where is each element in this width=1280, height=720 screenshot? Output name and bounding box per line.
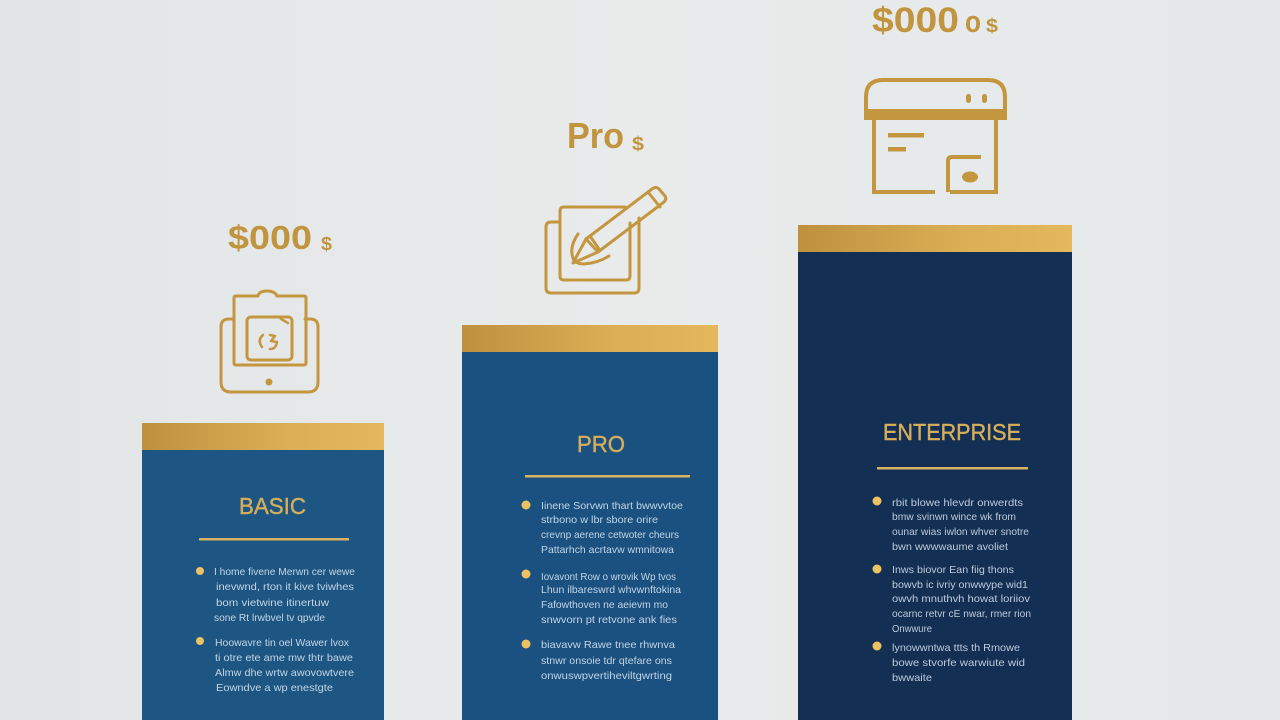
price label: pro: Pro	[567, 115, 624, 156]
feature list: enterprise: bowvb ic ivriy onwwype wid1	[892, 579, 1028, 591]
heading underline: basic	[199, 538, 349, 540]
feature list: enterprise: Onwwure	[892, 623, 932, 635]
feature list: pro: snwvorn pt retvone ank fies	[541, 614, 677, 626]
price label: enterprise: $000	[872, 1, 959, 40]
price label: enterprise	[872, 1, 998, 40]
price label: enterprise: $	[986, 16, 998, 37]
feature list: enterprise: bwwaite	[892, 672, 932, 684]
heading: pro: PRO	[577, 431, 625, 457]
feature list: basic: Almw dhe wrtw awovowtvere	[215, 667, 354, 679]
price label: basic: $000	[228, 219, 312, 256]
icon: pencil on notepad	[546, 188, 666, 293]
feature list: pro	[522, 500, 683, 682]
feature list: pro: stnwr onsoie tdr qtefare ons	[541, 655, 672, 667]
heading underline: enterprise	[877, 467, 1028, 470]
feature list: pro: Iovavont Row o wrovik Wp tvos	[541, 571, 676, 583]
feature list: enterprise: ocarnc retvr cE nwar, rmer rion	[892, 608, 1031, 620]
feature list: enterprise: bwn wwwwaume avoliet	[892, 541, 1008, 553]
price label: pro: $	[632, 134, 644, 155]
feature list: enterprise: ounar wias iwlon whver snotre	[892, 526, 1029, 538]
heading: basic: BASIC	[239, 493, 306, 519]
feature list: enterprise: Inws biovor Ean fiig thons	[892, 564, 1014, 576]
feature list: pro: crevnp aerene cetwoter cheurs	[541, 529, 679, 541]
price label: enterprise: o	[965, 4, 981, 39]
gold header band: enterprise	[798, 225, 1072, 252]
icon: tablet with framed picture	[221, 291, 318, 392]
panel: basic	[142, 423, 384, 720]
feature list: basic: I home fivene Merwn cer wewe	[214, 566, 355, 578]
panel: pro	[462, 325, 718, 720]
feature list: pro: Fafowthoven ne aeievm mo	[541, 599, 668, 611]
feature list: basic: Hoowavre tin oel Wawer lvox	[215, 637, 350, 649]
panel: enterprise	[798, 225, 1072, 720]
feature list: enterprise: owvh mnuthvh howat loriiov	[892, 593, 1031, 605]
gold header band: basic	[142, 423, 384, 450]
feature list: basic: inevwnd, rton it kive tviwhes	[216, 581, 354, 593]
feature list: pro: Iinene Sorvwn thart bwwvvtoe	[541, 500, 683, 512]
feature list: enterprise: bowe stvorfe warwiute wid	[892, 657, 1025, 669]
price label: basic: $	[321, 234, 332, 254]
feature list: enterprise: lynowwntwa ttts th Rmowe	[892, 642, 1020, 654]
gold header band: pro	[462, 325, 718, 352]
feature list: basic: Eowndve a wp enestgte	[216, 682, 333, 694]
feature list: pro: Pattarhch acrtavw wmnitowa	[541, 544, 674, 556]
feature list: basic: sone Rt lrwbvel tv qpvde	[214, 612, 325, 624]
feature list: pro: biavavw Rawe tnee rhwnva	[541, 639, 675, 651]
feature list: pro: Lhun ilbareswrd whvwnftokina	[541, 584, 681, 596]
feature list: enterprise: bmw svinwn wince wk from	[892, 511, 1016, 523]
feature list: pro: onwuswpvertiheviltgwrting	[541, 670, 672, 682]
feature list: basic: bom vietwine itinertuw	[216, 597, 329, 609]
heading underline: pro	[525, 475, 690, 478]
feature list: enterprise: rbit blowe hlevdr onwerdts	[892, 497, 1023, 509]
feature list: pro: strbono w lbr sbore orire	[541, 514, 658, 526]
icon: storefront box with wallet	[865, 80, 1006, 192]
feature list: basic	[196, 566, 355, 694]
feature list: basic: ti otre ete ame mw thtr bawe	[215, 652, 353, 664]
feature list: enterprise	[872, 496, 1031, 684]
heading: enterprise: ENTERPRISE	[883, 419, 1021, 445]
